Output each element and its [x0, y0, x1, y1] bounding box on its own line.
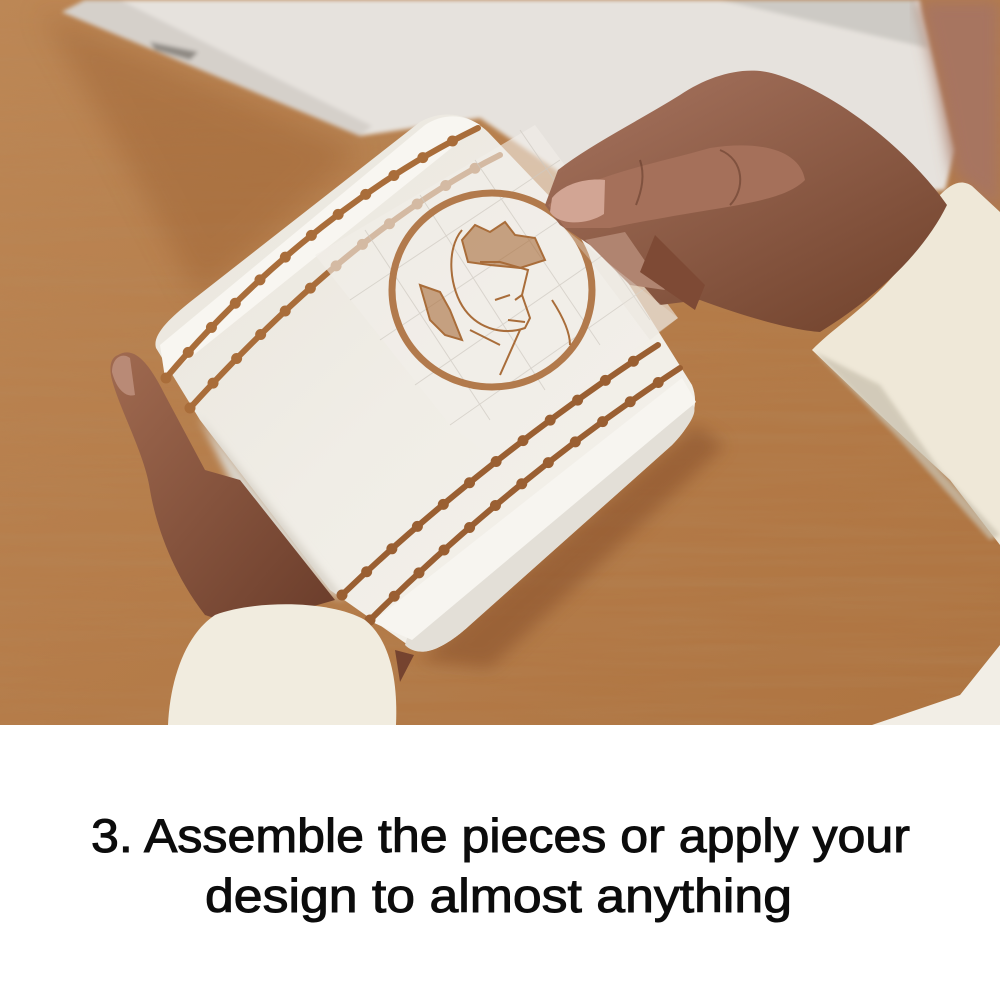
gold circle emblem — [392, 193, 592, 387]
caption heading: 3. Assemble the pieces or apply your — [91, 809, 910, 862]
right hand — [545, 71, 947, 340]
left sleeve — [168, 604, 396, 725]
transfer tape — [315, 125, 678, 455]
caption panel — [0, 725, 1000, 1000]
line-art portrait — [420, 222, 570, 375]
caption heading: design to almost anything — [205, 869, 792, 922]
lower rim — [405, 405, 694, 652]
fingers holding tape — [585, 232, 665, 290]
gold band bottom 2 — [370, 368, 680, 620]
sleeve fold shadow — [815, 352, 1000, 540]
left body shade — [198, 415, 345, 600]
photo: hands applying a design to a mug — [0, 0, 1000, 725]
left hand — [110, 352, 414, 682]
person's shoulder, top right — [918, 0, 1000, 212]
thumb — [548, 145, 805, 228]
mug body — [155, 115, 696, 652]
white sleeve, bottom right corner — [872, 645, 1000, 725]
wood grain — [0, 0, 1000, 725]
transfer tape grid — [350, 130, 650, 425]
left thumbnail — [112, 356, 135, 396]
tape over fingertips — [560, 225, 678, 340]
gold band top 1 — [166, 128, 478, 378]
upper rim highlight — [160, 116, 480, 378]
right sleeve — [812, 183, 1000, 545]
laptop in background — [62, 0, 955, 200]
caption heading — [91, 809, 910, 922]
wooden table — [0, 0, 1000, 725]
gold band top 2 — [190, 155, 500, 408]
thumbnail — [550, 180, 605, 222]
gold band bottom 1 — [342, 345, 658, 595]
shadow under laptop — [40, 10, 360, 300]
mug shadow — [420, 425, 725, 668]
